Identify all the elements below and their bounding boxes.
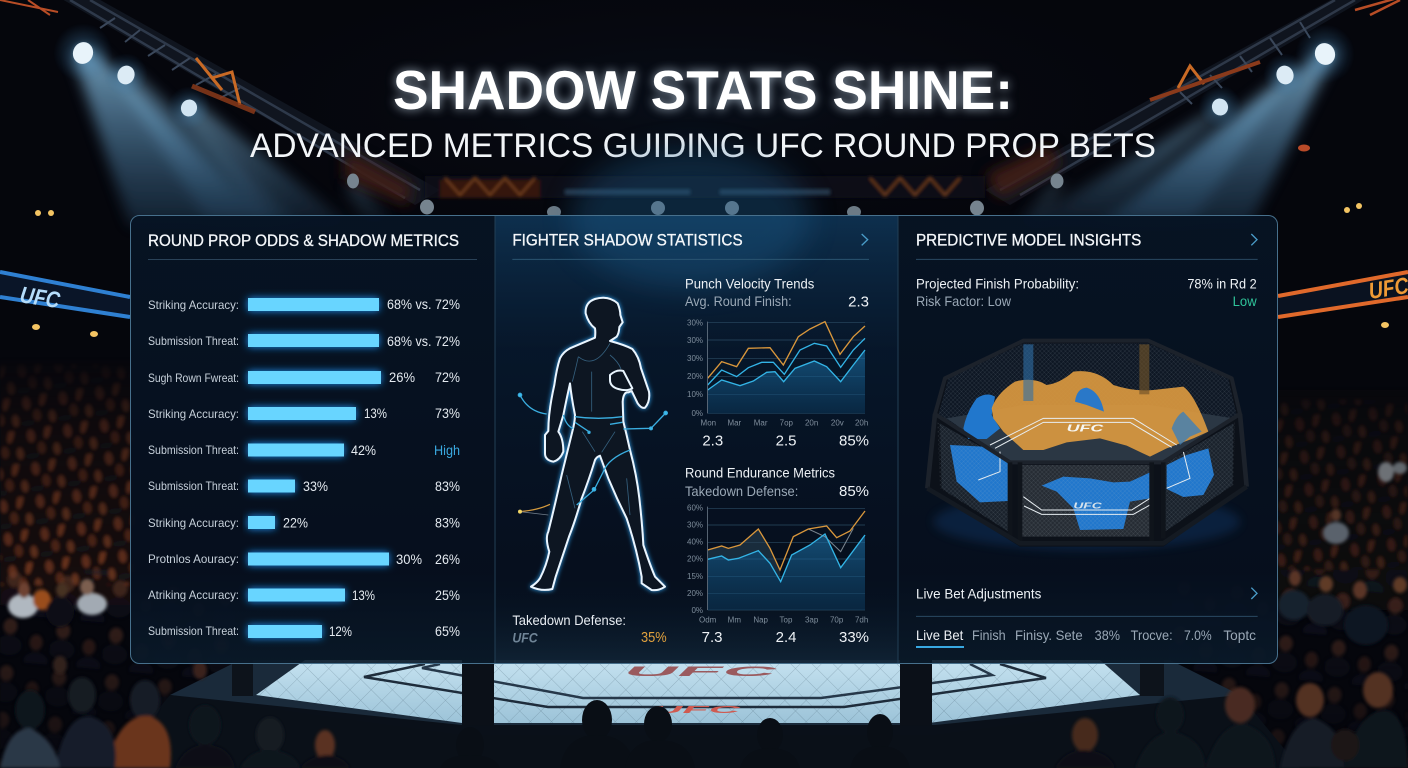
row: submission threat 3: 83% [435, 479, 460, 494]
chart: punch velocity trends: 30% [687, 336, 703, 345]
cage logos: UFC [1073, 500, 1103, 510]
panel: fighter shadow statistics [512, 232, 869, 646]
text: projected finish: Projected Finish Probability: [916, 275, 1079, 291]
row: sugh rown fwreat: 72% [435, 370, 460, 385]
chart: round endurance metrics: 85% [839, 483, 869, 500]
row: striking accuracy [148, 297, 460, 312]
spotlights [53, 23, 1355, 218]
panel: round prop odds [148, 232, 477, 639]
chart: round endurance metrics: 2.4 [776, 629, 797, 646]
title [250, 59, 1156, 165]
text: takedown defense summary: UFC [512, 630, 538, 646]
LED band right [1278, 272, 1408, 317]
cage frame [927, 341, 1247, 545]
dashboard panel [130, 148, 1278, 664]
row: protnlos aouracy: 30% [396, 552, 422, 567]
row: protnlos aouracy: 26% [435, 552, 460, 567]
row: striking accuracy: Striking Accuracy: [148, 298, 239, 312]
row: striking accuracy 3 [148, 516, 460, 530]
icon: chevron [1251, 234, 1257, 245]
octagon canvas [110, 660, 1300, 768]
foreground audience silhouettes [440, 700, 910, 768]
panel: predictive model insights [916, 232, 1258, 648]
row: submission threat 4: 65% [435, 624, 460, 639]
chart: round endurance metrics: Round Endurance Metrics [685, 465, 835, 481]
heading: round prop odds: ROUND PROP ODDS & SHADOW METRICS [148, 232, 459, 250]
cage floor markings [978, 418, 1190, 514]
chart: round endurance metrics: 70p [830, 615, 844, 624]
row: striking accuracy 3: 22% [283, 516, 308, 530]
chart: round endurance metrics [685, 465, 869, 646]
crowd highlights [8, 462, 1407, 645]
row: atriking accuracy: Atriking Accuracy: [148, 588, 239, 602]
text: projected finish [916, 275, 1258, 309]
foreground audience right [1055, 672, 1408, 768]
chart: round endurance metrics: 33% [839, 629, 869, 646]
text: takedown defense summary: Takedown Defense: [512, 612, 626, 628]
row: submission threat: 68% vs. 72% [387, 334, 460, 349]
row: submission threat [148, 334, 460, 349]
tabs: live bet: 7.0% [1184, 627, 1212, 643]
icon: chevron [862, 234, 868, 245]
chart: punch velocity trends: Punch Velocity Trends [685, 275, 814, 291]
chart: round endurance metrics: 0% [691, 606, 703, 615]
subtitle: ADVANCED METRICS GUIDING UFC ROUND PROP BETS [250, 127, 1156, 165]
figure: fighter outline [531, 298, 665, 590]
row: striking accuracy 2: Striking Accuracy: [148, 407, 239, 421]
row: submission threat 2 [148, 443, 460, 458]
truss left [0, 0, 440, 205]
row: striking accuracy 3: Striking Accuracy: [148, 516, 239, 530]
tabs: live bet: Trocve: [1131, 627, 1173, 643]
row: submission threat 4: Submission Threat: [148, 624, 239, 638]
row: sugh rown fwreat: Sugh Rown Fwreat: [148, 371, 239, 385]
tabs: live bet: Toptc [1223, 627, 1256, 643]
chart: punch velocity trends: Mar [727, 418, 742, 427]
chart: punch velocity trends: 2.5 [776, 432, 797, 449]
chart: round endurance metrics: Nap [753, 615, 769, 624]
chart: round endurance metrics: 30% [687, 520, 703, 529]
octagon canvas: UFC [651, 705, 743, 716]
chart: punch velocity trends: 85% [839, 432, 869, 449]
chart: round endurance metrics: Odm [699, 615, 717, 624]
chart: round endurance metrics: Takedown Defense: [685, 483, 798, 499]
row: sugh rown fwreat: 26% [389, 370, 415, 385]
chart: round endurance metrics: Top [780, 615, 793, 624]
row: striking accuracy 2: 73% [435, 406, 460, 421]
row: submission threat: Submission Threat: [148, 334, 239, 348]
chart: punch velocity trends [685, 275, 869, 449]
row: striking accuracy 2 [148, 406, 460, 421]
chart: round endurance metrics: 3ap [805, 615, 819, 624]
heading: predictive model insights: PREDICTIVE MODEL INSIGHTS [916, 232, 1141, 250]
chart: punch velocity trends: 20% [687, 372, 703, 381]
chart: punch velocity trends: 20v [831, 418, 844, 427]
text: takedown defense summary: 35% [641, 629, 667, 646]
chart: round endurance metrics: 20% [687, 589, 703, 598]
chart: punch velocity trends: 20n [805, 418, 818, 427]
crowd: stands left and right [0, 360, 1408, 768]
row: atriking accuracy: 13% [352, 588, 375, 603]
cage logos: UFC [1067, 424, 1105, 435]
heatmap: blue zones [950, 395, 1214, 530]
figure: tracking lines [518, 393, 667, 515]
small arena lights [32, 144, 1389, 337]
chart: punch velocity trends: 30% [687, 354, 703, 363]
chart: punch velocity trends: Avg. Round Finish: [685, 293, 792, 309]
row: atriking accuracy: 25% [435, 588, 460, 603]
tabs: live bet [916, 627, 1256, 648]
chart: punch velocity trends: 0% [691, 409, 703, 418]
row: striking accuracy 2: 13% [364, 406, 387, 421]
LED band left: UFC [18, 281, 62, 313]
chart: punch velocity trends: 30% [687, 318, 703, 327]
tabs: live bet: Finish [972, 627, 1006, 643]
chart: round endurance metrics: 60% [687, 504, 703, 513]
row: sugh rown fwreat [148, 370, 460, 385]
chart: punch velocity trends: 2.3 [848, 294, 869, 311]
heading: fighter shadow statistics: FIGHTER SHADOW STATISTICS [512, 232, 743, 250]
chart: punch velocity trends: Mar [754, 418, 768, 427]
row: submission threat 2: Submission Threat: [148, 443, 239, 457]
row: submission threat 4: 12% [329, 624, 352, 639]
row: protnlos aouracy: Protnlos Aouracy: [148, 552, 239, 566]
chart: punch velocity trends: 10% [687, 390, 703, 399]
tabs: live bet: 38% [1095, 627, 1120, 643]
chart: punch velocity trends: 2.3 [702, 432, 723, 449]
cage pads [1023, 344, 1033, 401]
text: projected finish: Risk Factor: Low [916, 293, 1012, 309]
truss right [985, 0, 1408, 205]
tabs: live bet: Live Bet [916, 627, 963, 643]
LED band left [0, 272, 130, 317]
row: protnlos aouracy [148, 552, 460, 567]
cage front mesh [937, 422, 1010, 532]
chart: punch velocity trends: 20h [855, 418, 868, 427]
cage logos [1067, 424, 1105, 510]
row: submission threat 3: Submission Threat: [148, 479, 239, 493]
row: submission threat 3 [148, 479, 460, 494]
row: submission threat 4 [148, 624, 460, 639]
tabs: live bet: Finisy. Sete [1015, 627, 1083, 643]
row: submission threat 2: 42% [351, 443, 376, 458]
icon: chevron live bets [1251, 588, 1257, 599]
chart: round endurance metrics: 40% [687, 538, 703, 547]
chart: round endurance metrics: 15% [687, 572, 703, 581]
octagon cage heatmap [927, 341, 1247, 550]
row: striking accuracy: 68% vs. 72% [387, 297, 460, 312]
row: submission threat 2: High [434, 443, 460, 458]
truss centre [425, 176, 985, 198]
text: projected finish: 78% in Rd 2 [1187, 275, 1257, 291]
spotlight beams [74, 50, 1336, 225]
figure: muscle lines [567, 343, 630, 515]
chart: round endurance metrics: 7dh [855, 615, 868, 624]
text: takedown defense summary [512, 612, 667, 646]
row: atriking accuracy [148, 588, 460, 603]
chart: round endurance metrics: Mm [728, 615, 741, 624]
chart: punch velocity trends: Mon [701, 418, 716, 427]
text: projected finish: Low [1233, 293, 1258, 309]
row: striking accuracy 3: 83% [435, 516, 460, 530]
heatmap: orange zone [992, 371, 1208, 457]
text: live bet adjustments: Live Bet Adjustments [916, 585, 1041, 601]
chart: round endurance metrics: 7.3 [702, 629, 723, 646]
row: submission threat 3: 33% [303, 479, 328, 494]
chart: round endurance metrics: 20% [687, 555, 703, 564]
foreground audience left [0, 656, 350, 768]
octagon canvas: UFC [624, 663, 781, 679]
title: SHADOW STATS SHINE: [393, 59, 1013, 121]
chart: punch velocity trends: 7op [780, 418, 794, 427]
